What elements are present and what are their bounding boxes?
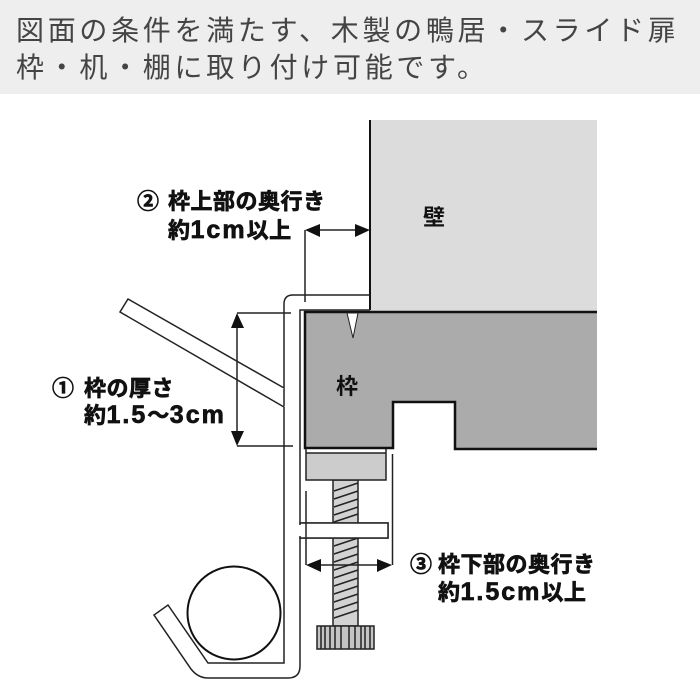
label 3: 枠下部の奥行き: [438, 552, 596, 577]
header band: 枠・机・棚に取り付け可能です。: [16, 52, 489, 83]
label 1: 約1.5～3cm: [84, 401, 226, 429]
door frame: [305, 312, 597, 449]
dimension 3: lower depth: [306, 454, 392, 572]
label 1: [52, 376, 226, 429]
screw shaft: [333, 480, 358, 626]
roller circle: [188, 566, 280, 660]
clamp bracket: [120, 295, 388, 678]
label 1: 枠の厚さ: [84, 376, 174, 401]
label 2: [137, 189, 326, 244]
label 2: ②: [137, 189, 160, 214]
label 1: ①: [52, 376, 75, 401]
label 3: ③: [410, 552, 433, 577]
header band: [0, 0, 700, 94]
screw pressure plate: [306, 449, 386, 480]
nail: [347, 313, 358, 338]
header band: 図面の条件を満たす、木製の鴨居・スライド扉: [16, 15, 679, 46]
label 3: 約1.5cm以上: [438, 578, 586, 606]
wall: [370, 120, 597, 312]
knurled knob: [317, 626, 374, 649]
door frame: 枠: [336, 374, 358, 399]
dimension 1: frame thickness: [231, 313, 293, 446]
label 3: [410, 552, 596, 606]
label 2: 約1cm以上: [168, 216, 292, 244]
dimension 2: upper depth: [305, 224, 370, 302]
wall: 壁: [423, 205, 445, 230]
label 2: 枠上部の奥行き: [168, 189, 326, 214]
